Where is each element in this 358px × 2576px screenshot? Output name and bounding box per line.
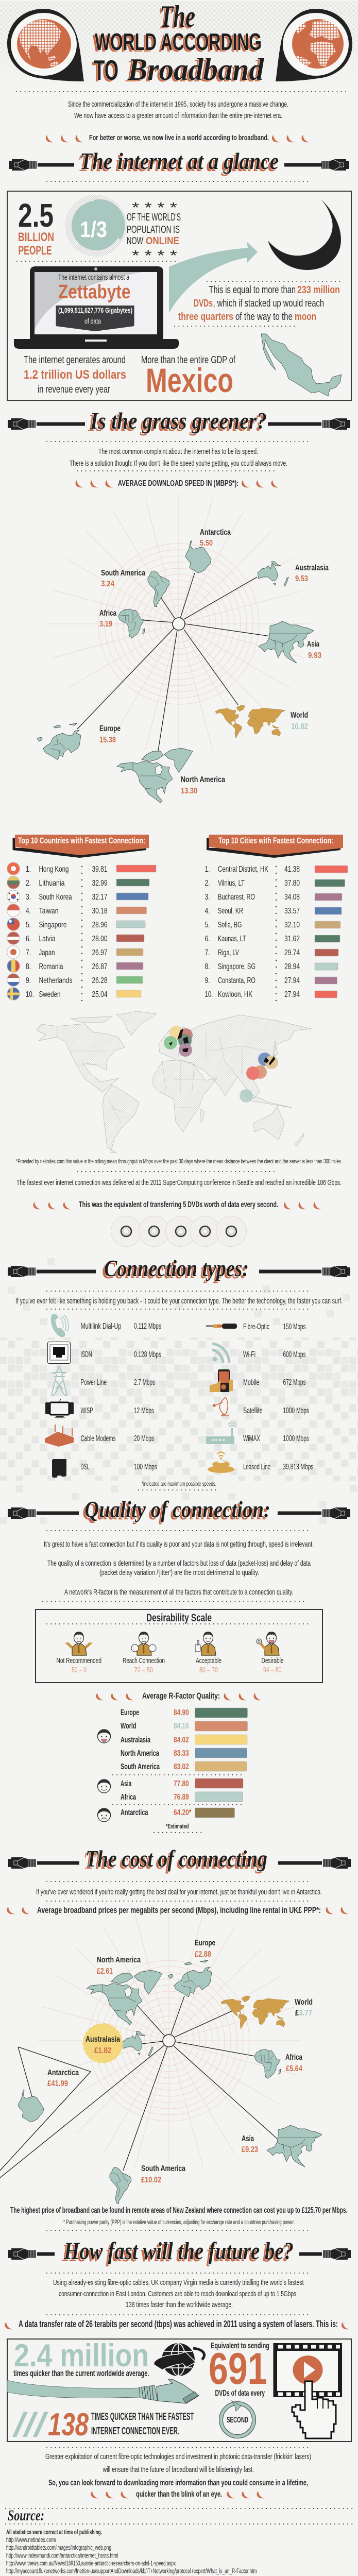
scale: reach connection: [123, 1632, 165, 1674]
region: Europe: 15.38: [99, 736, 116, 744]
list: top 10 cities: Singapore, SG: [218, 962, 255, 971]
heading: the cost of connecting: The cost of connecting: [86, 1845, 267, 1872]
rows: 7.: [26, 948, 31, 957]
scale: desirable: [257, 1632, 283, 1674]
title: [92, 0, 264, 88]
list: top 10 cities: 10.: [205, 990, 213, 999]
heading: is the grass greener: Is the grass greener?: [90, 408, 267, 434]
stat: 691 DVDs every second: Equivalent to sending: [211, 2342, 269, 2350]
text: DVD stack: of the way to the: [235, 311, 293, 323]
region: Asia: 9.93: [308, 651, 321, 660]
list: top 10 cities: Kaunas, LT: [218, 935, 246, 943]
icon: laptop with zettabyte: [14, 266, 179, 349]
stat: population online: ONLINE: [146, 235, 179, 247]
list: connection types: Satellite: [243, 1406, 263, 1415]
rows: 32.17: [92, 893, 108, 902]
title: The: [160, 0, 195, 33]
text: revenue: in revenue every year: [38, 384, 110, 395]
callout: blink of an eye: quicker than the blink of an eye.: [136, 2490, 222, 2499]
connectors: [77, 573, 270, 751]
list: connection types: 39,813 Mbps: [283, 1463, 313, 1471]
header: right globe pin: [276, 9, 352, 81]
scale: desirable: Desirable: [262, 1656, 283, 1665]
bar chart: R-factor quality: Asia: [121, 1780, 131, 1788]
bar chart: R-factor quality: 84.02: [174, 1736, 189, 1744]
list: top 10 cities: 1.: [205, 865, 210, 874]
background: halftone texture: [0, 1, 358, 89]
bar chart: R-factor quality: 84.90: [174, 1708, 189, 1717]
icon: power line tower: [52, 1366, 67, 1395]
text: revenue: The internet generates around: [24, 354, 126, 366]
text: quality explanation: (packet delay variation /'jitter') are the most detrimental to quality.: [99, 1568, 259, 1577]
region: Australasia highlight: Australasia: [86, 2035, 120, 2044]
connectors: [0, 1996, 278, 2178]
icon: mobile in hand: [210, 1369, 233, 1392]
list: top 10 cities: Central District, HK: [218, 865, 268, 874]
region: Europe: [168, 1939, 215, 1997]
stat: 2.4 million: 2.4 million: [14, 2338, 149, 2374]
list: top 10 cities: 3.: [205, 893, 210, 902]
bar chart: R-factor quality: 83.33: [174, 1749, 189, 1758]
icon: sad face: [98, 1808, 110, 1822]
icon: TV: [45, 1399, 74, 1417]
region: North America: £2.61: [97, 1967, 113, 1976]
banner: top 10 countries: [12, 835, 149, 858]
rows: 5.: [26, 921, 31, 929]
region: World: 10.82: [291, 722, 308, 731]
rows: Lithuania: [39, 879, 65, 888]
banner: top 10 cities: [207, 835, 343, 858]
intro text: speed: [70, 448, 287, 468]
icon: neutral smile face: [98, 1780, 110, 1793]
text: DVD stack: three quarters: [178, 311, 233, 323]
text: GDP of Mexico: [141, 354, 235, 399]
stat: 691 DVDs every second: SECOND: [227, 2416, 248, 2425]
stat: population online: * * * *: [132, 247, 177, 263]
region: Antarctica: 5.50: [200, 539, 213, 548]
list: top 10 cities: Constanta, RO: [218, 976, 255, 985]
region: Africa: 3.19: [99, 620, 112, 629]
rows: 4.: [26, 907, 31, 916]
list: connection types: Leased Line: [243, 1463, 270, 1471]
bar chart: R-factor quality: Australasia: [121, 1736, 150, 1744]
rows: 2.: [26, 879, 31, 888]
text: DVD stack: moon: [295, 311, 316, 323]
heading: is the grass greener: [8, 408, 350, 436]
text: quality explanation: [44, 1540, 314, 1597]
rows: 39.81: [92, 865, 108, 874]
bar chart: R-factor quality: Africa: [121, 1793, 136, 1802]
intro text: speed: The most common complaint about the internet has to be its speed.: [98, 448, 258, 456]
text block: source list: All statistics were correct at time of publishing.: [6, 2529, 102, 2536]
bar chart: R-factor quality: Antarctica: [121, 1808, 148, 1817]
text: conclusion: will ensure that the future of broadband will be blisteringly fast.: [103, 2465, 254, 2474]
region: World: £: [295, 2009, 299, 2018]
banner: top 10 countries: Top 10 Countries with Fastest Connection:: [18, 836, 145, 845]
chart: world map of fastest locations: [37, 1011, 312, 1153]
region: Europe: £2.88: [195, 1950, 211, 1959]
icon: map of Mexico: [261, 334, 342, 396]
stat: population online: * * * *: [132, 199, 177, 215]
list: top 10 cities: 34.08: [284, 893, 300, 902]
title: The: [158, 1, 194, 35]
panel title: Desirability Scale: [146, 1612, 212, 1624]
heading: the internet at a glance: The internet at a glance: [80, 148, 279, 174]
intro text: We now have access to a greater amount of information than the entire pre-internet era.: [74, 112, 282, 120]
region: South America: £10.02: [141, 2176, 161, 2184]
subheading: average download speed: AVERAGE DOWNLOAD SPEED IN (MBPS*):: [118, 479, 238, 488]
region: Africa: Africa: [285, 2053, 302, 2062]
icon: ethernet cable: [7, 2379, 199, 2403]
list: connection types: 100 Mbps: [134, 1463, 157, 1471]
rows: Sweden: [39, 990, 61, 999]
bar chart: R-factor quality: 77.80: [174, 1780, 189, 1788]
stat: 691 DVDs every second: DVDs of data every: [215, 2389, 265, 2398]
list: top 10 cities: Vilnius, LT: [218, 879, 245, 888]
intro text: [68, 100, 288, 120]
region: North America: North America: [97, 1956, 141, 1964]
rows: Singapore: [39, 921, 67, 929]
title: TO: [94, 54, 118, 86]
text: future intro: [53, 2278, 304, 2309]
icon: fibre optic cable: [206, 1324, 237, 1329]
text: future intro: 138 times faster than the worldwide average.: [126, 2300, 233, 2309]
scale: desirable: 94 – 80: [263, 1666, 281, 1674]
rows: Japan: [39, 948, 55, 957]
list: connection types: WiMAX: [243, 1434, 260, 1443]
text block: source list: [6, 2529, 354, 2576]
scale: not recommended: 50 – 0: [72, 1666, 87, 1674]
region: Antarctica: Antarctica: [47, 2069, 79, 2077]
heading: quality of connection: Quality of connection:: [84, 1496, 270, 1522]
list: top 10 cities: 33.57: [284, 907, 300, 916]
text: DVD stack: 233 million: [297, 284, 340, 296]
rows: 26.87: [92, 962, 108, 971]
region: North America: [87, 1956, 162, 2025]
panel: internet at a glance: [7, 191, 351, 400]
region: Australasia highlight: [83, 2024, 153, 2063]
stat: 2.5 billion people: PEOPLE: [19, 244, 52, 258]
footnote: estimated: *Estimated: [166, 1823, 189, 1830]
list: top 10 countries: [7, 862, 156, 1002]
rows: 28.96: [92, 921, 108, 929]
region: Africa: £5.64: [286, 2064, 302, 2073]
text block: source list: http://www.indexmundi.com/antarctica/internet_hosts.html: [6, 2552, 118, 2559]
list: top 10 cities: 4.: [205, 907, 210, 916]
stat: population online: [127, 199, 181, 263]
stat: 2.5 billion people: BILLION: [18, 230, 54, 244]
chart: download speed radial: [37, 493, 329, 803]
text: revenue: [24, 354, 126, 395]
region: South America: South America: [141, 2164, 185, 2173]
list: connection types: Cable Modems: [80, 1434, 115, 1443]
subheading: average R-factor quality: Average R-Factor Quality:: [142, 1691, 220, 1701]
list: top 10 cities: [205, 865, 348, 1002]
icon: ethernet port: [47, 1342, 70, 1363]
icon: laptop with zettabyte: The internet contains almost a: [58, 274, 130, 282]
rows: 28.00: [92, 935, 108, 943]
region: World: 3.77: [299, 2009, 312, 2018]
rows: 8.: [26, 962, 31, 971]
text: DVD stack: This is equal to more than: [209, 284, 296, 296]
list: connection types: 0.128 Mbps: [134, 1350, 161, 1359]
region: Australasia: Australasia: [295, 564, 329, 572]
icon: globe with arrow: [154, 2343, 204, 2376]
rows: Netherlands: [39, 976, 72, 985]
arrow: teal to moon: [169, 242, 258, 313]
region: Australasia highlight: £1.82: [94, 2046, 111, 2055]
title: TO: [92, 56, 116, 88]
text: DVD stack: DVDs: [194, 298, 213, 309]
list: connection types: Power Line: [80, 1378, 107, 1387]
region: Australasia: 9.53: [295, 574, 308, 583]
list: top 10 cities: 32.10: [284, 921, 300, 929]
text: GDP of Mexico: Mexico: [146, 361, 233, 399]
rows: 1.: [26, 865, 31, 874]
rows: 9.: [26, 976, 31, 985]
bar chart: R-factor quality: World: [121, 1722, 136, 1731]
scale: acceptable: [195, 1632, 221, 1674]
list: connection types: Fibre-Optic: [243, 1323, 269, 1331]
region: Asia: £9.23: [242, 2145, 258, 2154]
stat: population online: POPULATION IS: [127, 224, 180, 235]
background: pixel checker squares: [0, 1258, 358, 1524]
rows: Hong Kong: [39, 865, 69, 874]
list: connection types: Mobile: [243, 1378, 260, 1387]
stat: 138 times quicker: TIMES QUICKER THAN THE FASTEST: [91, 2411, 194, 2422]
rows: 26.28: [92, 976, 108, 985]
list: connection types: 20 Mbps: [134, 1434, 154, 1443]
chart: one third pie: [65, 195, 127, 257]
rows: 25.04: [92, 990, 108, 999]
icon: laptop with zettabyte: of data: [84, 317, 101, 325]
list: connection types: 600 Mbps: [283, 1350, 306, 1359]
rows: South Korea: [39, 893, 72, 902]
stat: 2.5 billion people: 2.5: [18, 197, 54, 234]
stat: population online: NOW: [127, 235, 143, 247]
region: Asia: [242, 2125, 322, 2167]
icon: happy face: [98, 1730, 110, 1743]
icon: leased line hub: [208, 1452, 234, 1473]
region: World: [215, 705, 308, 738]
bar chart: R-factor quality: 64.20*: [174, 1808, 192, 1817]
text: revenue: 1.2 trillion US dollars: [24, 368, 126, 382]
panel: desirability scale: [36, 1609, 322, 1683]
scale: reach connection: 70 – 50: [134, 1666, 153, 1674]
list: connection types: 0.112 Mbps: [134, 1322, 161, 1331]
stat: population online: OF THE WORLD'S: [127, 212, 181, 223]
text: GDP of Mexico: More than the entire GDP of: [141, 354, 235, 366]
rows: 6.: [26, 935, 31, 943]
list: connection types: 1000 Mbps: [283, 1406, 309, 1415]
rows: 30.18: [92, 907, 108, 916]
text block: source list: http://www.netindex.com/: [6, 2536, 56, 2544]
region: Antarctica: Antarctica: [200, 528, 231, 537]
region: Antarctica: £41.99: [47, 2079, 68, 2088]
list: connection types: [45, 1314, 313, 1478]
rows: 3.: [26, 893, 31, 902]
icon: laptop with zettabyte: Zettabyte: [58, 281, 131, 303]
bar chart: R-factor quality: Europe: [121, 1708, 139, 1717]
title: WORLD ACCORDING: [95, 28, 262, 55]
region: South America: [110, 2164, 185, 2204]
list: top 10 cities: 27.94: [284, 990, 300, 999]
list: top 10 cities: Riga, LV: [218, 948, 239, 957]
icon: phone: [51, 1314, 69, 1337]
header: left globe pin: [7, 9, 84, 81]
region: Antarctica: [18, 2069, 79, 2122]
heading: is the grass greener: Is the grass greener?: [88, 410, 265, 436]
bar chart: R-factor quality: 84.16: [174, 1722, 189, 1731]
list: connection types: 1000 Mbps: [283, 1434, 309, 1443]
list: top 10 cities: 5.: [205, 921, 210, 929]
rows: Latvia: [39, 935, 56, 943]
region: Europe: [37, 723, 121, 760]
list: connection types: Wi-Fi: [243, 1350, 255, 1359]
text: conclusion: [45, 2452, 311, 2487]
heading: how fast will the future be: How fast will the future be?: [63, 2238, 294, 2265]
list: top 10 cities: 41.38: [284, 865, 300, 874]
region: South America: 3.24: [101, 580, 114, 588]
list: top 10 cities: 6.: [205, 935, 210, 943]
title: WORLD ACCORDING: [93, 30, 260, 57]
stat: 691 DVDs every second: 691: [209, 2344, 267, 2394]
region: Africa: [99, 609, 145, 638]
region: Australasia: [258, 562, 329, 586]
list: top 10 cities: Bucharest, RO: [218, 893, 255, 902]
heading: the cost of connecting: The cost of connecting: [83, 1848, 265, 1874]
list: connection types: WISP: [80, 1406, 93, 1415]
list: top 10 cities: 8.: [205, 962, 210, 971]
icon: satellite dish: [213, 1397, 229, 1416]
bar chart: R-factor quality: 83.02: [174, 1762, 189, 1771]
rows: Romania: [39, 962, 63, 971]
heading: the internet at a glance: The internet at a glance: [78, 150, 277, 176]
scale: not recommended: [57, 1632, 101, 1674]
icon: cable modem: [45, 1425, 74, 1447]
icon: moon crescent: [268, 199, 341, 270]
list: connection types: 150 Mbps: [283, 1323, 306, 1331]
list: connection types: 2.7 Mbps: [134, 1378, 155, 1387]
list: connection types: 12 Mbps: [134, 1406, 154, 1415]
bar chart: R-factor quality: South America: [121, 1762, 160, 1771]
icon: wifi: [212, 1344, 229, 1363]
flags: [7, 862, 20, 1001]
region: Asia: [259, 621, 321, 663]
heading: quality of connection: [8, 1496, 350, 1524]
chart: broadband prices radial: [0, 1910, 322, 2204]
scale: reach connection: Reach Connection: [123, 1656, 165, 1665]
list: top 10 cities: Sofia, BG: [218, 921, 242, 929]
list: top 10 cities: 29.74: [284, 948, 300, 957]
stat: 138 times quicker: 138: [48, 2407, 89, 2443]
list: top 10 cities: Seoul, KR: [218, 907, 243, 916]
chart: one third pie: 1/3: [80, 217, 107, 242]
stat: 2.5 billion people: [18, 197, 54, 258]
text block: source list: http://xandroidtablets.com/images/Infographic_web.png: [6, 2544, 111, 2551]
title: Broadband: [127, 53, 264, 87]
heading: the cost of connecting: [8, 1845, 351, 1874]
rows: 10.: [26, 990, 34, 999]
heading: connection types: Connection types:: [104, 1255, 249, 1281]
region: South America: South America: [101, 569, 145, 578]
footnote: maximum speeds: *indicated are maximum possible speeds.: [142, 1480, 216, 1487]
region: World: [221, 1996, 313, 2029]
region: Europe: Europe: [195, 1939, 215, 1947]
list: top 10 cities: 9.: [205, 976, 210, 985]
list: top 10 cities: Kowloon, HK: [218, 990, 252, 999]
list: connection types: Multilink Dial-Up: [80, 1322, 122, 1331]
scale: acceptable: 80 – 70: [199, 1666, 218, 1674]
list: top 10 cities: 37.80: [284, 879, 300, 888]
icon: laptop with zettabyte: (1,099,511,627,776 Gigabytes): [58, 306, 132, 314]
heading: source: Source:: [8, 2507, 44, 2524]
text block: source list: http://www.itnews.com.au/News/169150,aussie-antarctic-researchers-on-adsl-1-speed.aspx: [6, 2560, 176, 2567]
region: North America: North America: [181, 775, 225, 784]
region: World: World: [291, 711, 308, 720]
list: top 10 cities: 31.62: [284, 935, 300, 943]
bar chart: R-factor quality: 76.89: [174, 1793, 189, 1802]
list: top 10 cities: 28.94: [284, 962, 300, 971]
icon: film strip with play button and cursor: [273, 2343, 342, 2438]
list: top 10 cities: 27.94: [284, 976, 300, 985]
list: connection types: DSL: [80, 1463, 90, 1471]
subheading: average R-factor quality: [96, 1691, 261, 1701]
stat: 138 times quicker: INTERNET CONNECTION EVER.: [91, 2426, 179, 2437]
region: North America: 13.30: [181, 787, 197, 795]
bar chart: R-factor quality: North America: [121, 1749, 159, 1758]
heading: connection types: [8, 1255, 350, 1283]
region: Asia: Asia: [307, 640, 319, 649]
text: DVD stack: [178, 284, 340, 323]
region: Africa: Africa: [99, 609, 116, 618]
heading: connection types: Connection types:: [102, 1257, 247, 1283]
bar chart: R-factor quality: [98, 1708, 247, 1822]
callout: for better or worse: For better or worse, we now live in a world according to broadband.: [89, 133, 269, 142]
region: Africa: [254, 2049, 302, 2078]
list: top 10 cities: 2.: [205, 879, 210, 888]
region: North America: [117, 748, 225, 803]
title: Broadband: [125, 54, 262, 88]
heading: how fast will the future be: How fast will the future be?: [61, 2240, 292, 2267]
list: connection types: ISDN: [80, 1350, 92, 1359]
region: South America: [101, 569, 169, 607]
region: Europe: Europe: [99, 724, 121, 733]
rows: [26, 865, 156, 999]
icon: memory card: [52, 1459, 66, 1478]
rows: 26.97: [92, 948, 108, 957]
region: World: World: [295, 1998, 313, 2007]
stat: 691 DVDs every second: [209, 2342, 269, 2436]
region: Antarctica: [185, 528, 231, 573]
icons: five DVDs: [111, 1216, 246, 1247]
heading: the internet at a glance: [9, 148, 349, 176]
stat: 2.4 million: times quicker than the current worldwide average.: [13, 2369, 149, 2378]
stat: 138 times quicker: [12, 2407, 194, 2443]
scale: acceptable: Acceptable: [196, 1656, 221, 1665]
heading: quality of connection: Quality of connection:: [82, 1498, 268, 1524]
icon: WiMAX router: [206, 1422, 236, 1444]
rows: Taiwan: [39, 907, 59, 916]
list: connection types: 672 Mbps: [283, 1378, 306, 1387]
scale: not recommended: Not Recommended: [57, 1656, 101, 1665]
rows: 32.99: [92, 879, 108, 888]
panel: lasers: [7, 2338, 351, 2443]
region: Asia: Asia: [242, 2134, 254, 2143]
list: top 10 cities: 7.: [205, 948, 210, 957]
